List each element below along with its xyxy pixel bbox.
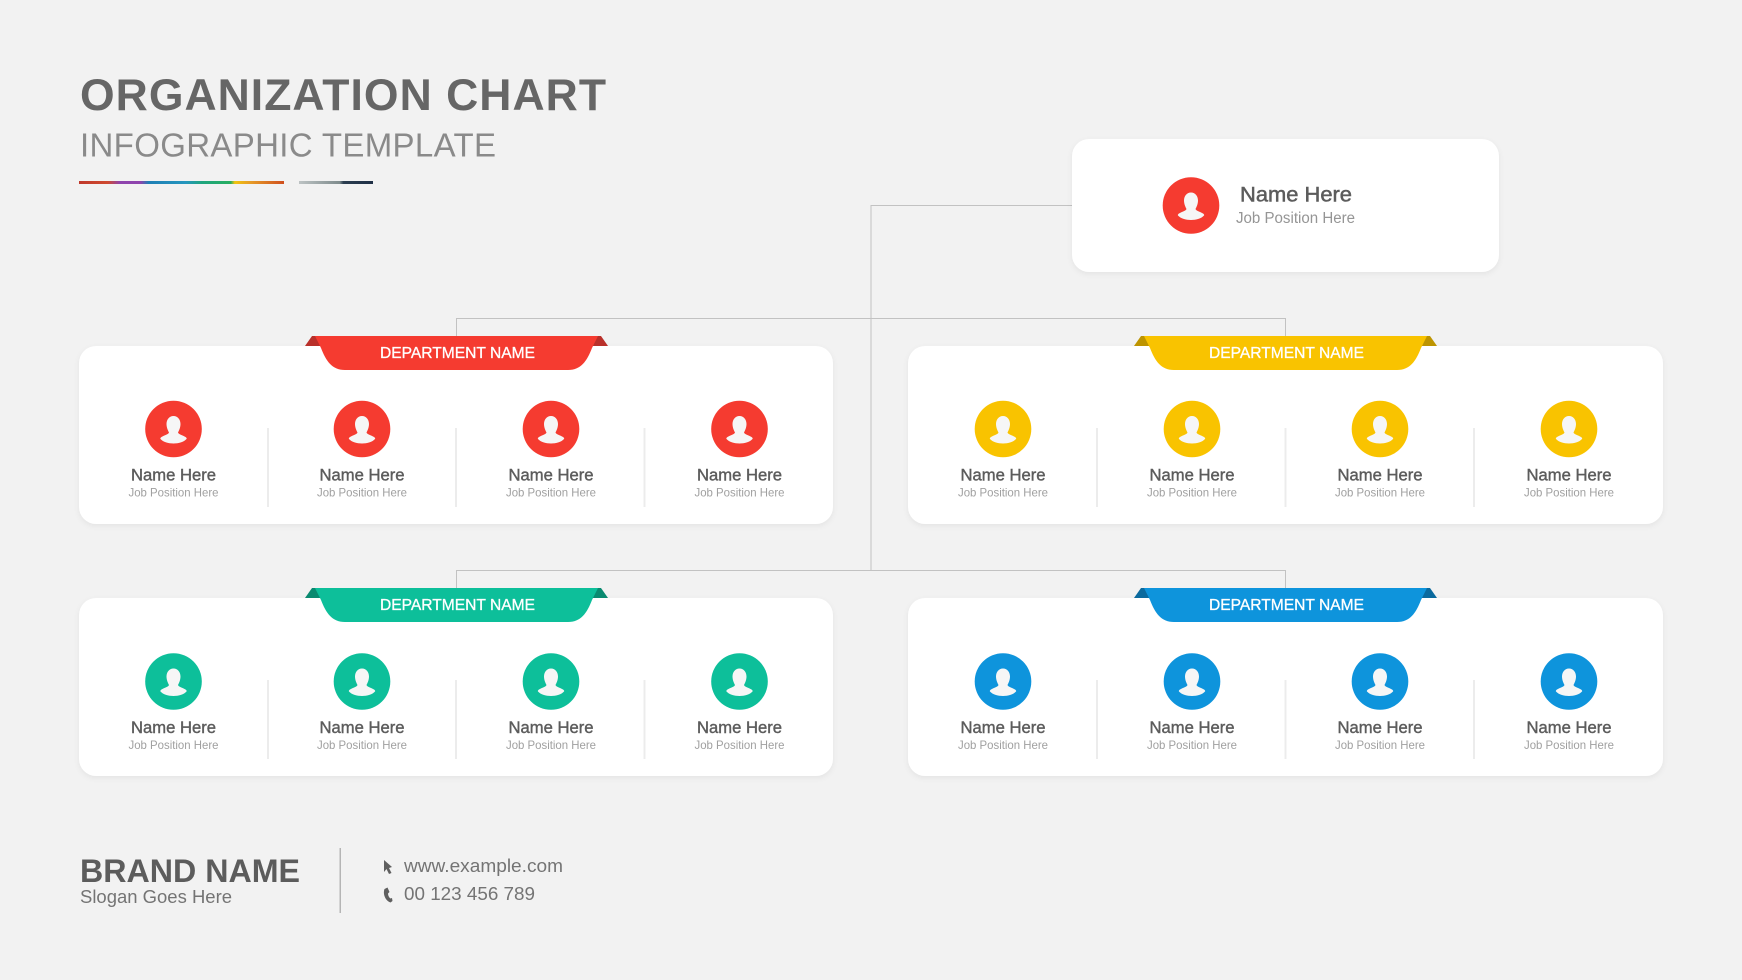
member 2	[317, 653, 407, 752]
member 3: Job Position Here	[1335, 486, 1425, 500]
member 1: Job Position Here	[958, 486, 1048, 500]
member 3: Job Position Here	[1335, 738, 1425, 752]
member 1	[128, 653, 219, 752]
panel: yellow department	[908, 336, 1663, 524]
member 3: Name Here	[1338, 719, 1422, 737]
panel: red department	[79, 336, 833, 524]
top card: head of organization	[1072, 139, 1499, 272]
member 2: Name Here	[1150, 719, 1234, 737]
member 1: Name Here	[131, 719, 216, 737]
member 1: Name Here	[960, 467, 1046, 485]
member 4	[1524, 401, 1614, 500]
name: Name Here	[1240, 184, 1352, 206]
ribbon: department name: DEPARTMENT NAME	[1209, 597, 1364, 614]
member 4: Job Position Here	[694, 738, 785, 752]
member 1: Name Here	[131, 467, 216, 485]
member 4	[694, 401, 785, 500]
heading: organization chart: ORGANIZATION CHART	[80, 71, 606, 120]
icon: cursor	[384, 860, 392, 874]
website: www.example.com	[403, 856, 563, 876]
slogan: Slogan Goes Here	[80, 887, 232, 907]
member 2: Name Here	[320, 719, 404, 737]
ribbon: department name	[305, 336, 608, 370]
subheading: infographic template: INFOGRAPHIC TEMPLATE	[80, 126, 496, 164]
member 2	[1147, 401, 1237, 500]
member 1: Name Here	[960, 719, 1046, 737]
member 1: Job Position Here	[128, 486, 219, 500]
footer	[80, 848, 563, 913]
member 4	[1524, 653, 1614, 752]
panel: green department	[79, 588, 833, 776]
title block	[79, 71, 606, 184]
panel: blue department	[908, 588, 1663, 776]
member 3	[506, 653, 596, 752]
member 3: Name Here	[508, 719, 594, 737]
member 3: Name Here	[508, 467, 594, 485]
member 1	[958, 401, 1048, 500]
member 2: Job Position Here	[317, 738, 407, 752]
member 4: Job Position Here	[694, 486, 785, 500]
ribbon: department name: DEPARTMENT NAME	[380, 597, 535, 614]
member 2	[317, 401, 407, 500]
brand name: BRAND NAME	[80, 853, 300, 889]
member 4: Name Here	[697, 467, 782, 485]
member 2: Job Position Here	[317, 486, 407, 500]
member 3: Job Position Here	[506, 486, 596, 500]
member 3	[506, 401, 596, 500]
job position: Job Position Here	[1236, 210, 1355, 227]
connector lines	[456, 206, 1286, 588]
member 4: Name Here	[1526, 719, 1612, 737]
rainbow accent bar	[79, 181, 284, 184]
member 4: Job Position Here	[1524, 738, 1614, 752]
member 4: Name Here	[697, 719, 782, 737]
phone number: 00 123 456 789	[404, 884, 535, 904]
member 4: Job Position Here	[1524, 486, 1614, 500]
ribbon: department name	[1134, 336, 1437, 370]
member 1	[128, 401, 219, 500]
ribbon: department name: DEPARTMENT NAME	[380, 345, 535, 362]
icon: avatar	[1163, 177, 1219, 234]
member 2: Name Here	[1150, 467, 1234, 485]
member 3: Name Here	[1338, 467, 1422, 485]
member 2: Name Here	[320, 467, 404, 485]
member 1: Job Position Here	[128, 738, 219, 752]
member 1	[958, 653, 1048, 752]
member 2: Job Position Here	[1147, 738, 1237, 752]
grey accent bar	[299, 181, 373, 184]
ribbon: department name	[305, 588, 608, 622]
member 4: Name Here	[1526, 467, 1612, 485]
ribbon: department name	[1134, 588, 1437, 622]
member 2	[1147, 653, 1237, 752]
member 3	[1335, 401, 1425, 500]
member 3: Job Position Here	[506, 738, 596, 752]
member 1: Job Position Here	[958, 738, 1048, 752]
member 4	[694, 653, 785, 752]
member 3	[1335, 653, 1425, 752]
icon: phone	[384, 888, 392, 902]
member 2: Job Position Here	[1147, 486, 1237, 500]
ribbon: department name: DEPARTMENT NAME	[1209, 345, 1364, 362]
